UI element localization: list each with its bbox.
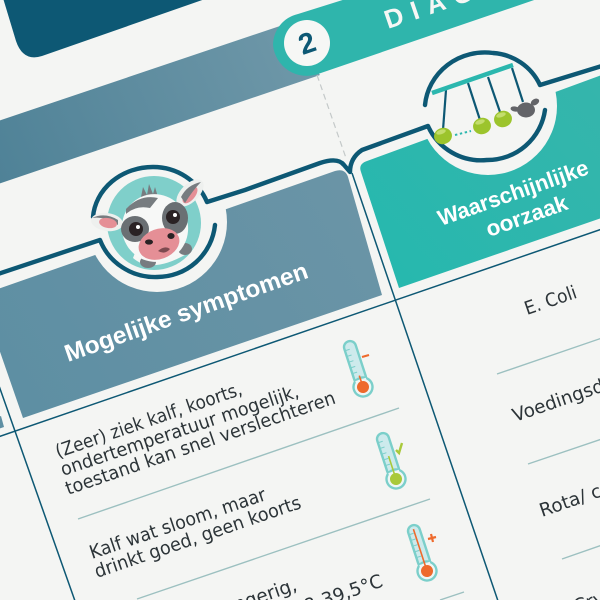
calf head bbox=[113, 185, 197, 271]
calf eyes bbox=[129, 210, 180, 236]
symptom 1 text: (Zeer) ziek kalf, koorts, bbox=[53, 379, 245, 463]
cradle strings bbox=[443, 68, 523, 130]
symptom 1 text: toestand kan snel verslechteren bbox=[63, 388, 338, 500]
column title: cause line 1: Waarschijnlijke bbox=[434, 155, 592, 231]
row dividers symptoms bbox=[78, 408, 464, 600]
symptom 2 text: drinkt goed, geen koorts bbox=[92, 493, 304, 583]
step number badge: 2 bbox=[294, 26, 320, 62]
calf body bbox=[133, 236, 190, 265]
calf snout bbox=[134, 223, 184, 265]
plus mark bbox=[428, 534, 436, 542]
check mark bbox=[396, 443, 402, 453]
green balls bbox=[432, 109, 514, 146]
dashed fold line bbox=[317, 75, 346, 158]
halo behind cow icon bbox=[87, 152, 227, 292]
sheep head ball bbox=[510, 97, 540, 118]
calf hair bbox=[141, 184, 158, 197]
minus mark bbox=[362, 355, 369, 357]
icon: newton cradle bbox=[432, 65, 540, 146]
step number badge bbox=[284, 20, 330, 66]
cause list: E. Coli bbox=[522, 282, 580, 320]
ball highlights bbox=[436, 111, 506, 136]
dotted motion bbox=[455, 131, 471, 135]
table lines bbox=[0, 173, 600, 600]
left column header fragment bbox=[0, 416, 4, 429]
calf hooves bbox=[140, 243, 192, 268]
step band: grey-blue bbox=[0, 26, 320, 184]
calf right ear bbox=[172, 175, 208, 211]
column title: cause line 2: oorzaak bbox=[482, 190, 572, 242]
panel: symptoms header bbox=[0, 170, 382, 418]
panel: cause header bbox=[360, 72, 600, 288]
step band: teal heading bbox=[273, 0, 589, 76]
row dividers causes bbox=[497, 338, 600, 559]
cause list bbox=[510, 282, 600, 600]
top dark header block bbox=[3, 0, 208, 57]
icon: thermometer high bbox=[403, 522, 439, 583]
outline connector line bbox=[0, 52, 600, 277]
icon: calf bbox=[90, 175, 208, 271]
halo behind cradle icon bbox=[419, 37, 557, 175]
icon: thermometer ok bbox=[372, 430, 408, 491]
calf patches bbox=[121, 197, 188, 242]
symptom 1 text: ondertemperatuur mogelijk, bbox=[58, 382, 302, 481]
column title: symptoms: Mogelijke symptomen bbox=[61, 258, 312, 368]
symptom 2 text: Kalf wat sloom, maar bbox=[87, 484, 269, 564]
calf left ear bbox=[90, 211, 124, 233]
cradle bar bbox=[432, 65, 513, 93]
icon: thermometer low bbox=[339, 338, 375, 399]
